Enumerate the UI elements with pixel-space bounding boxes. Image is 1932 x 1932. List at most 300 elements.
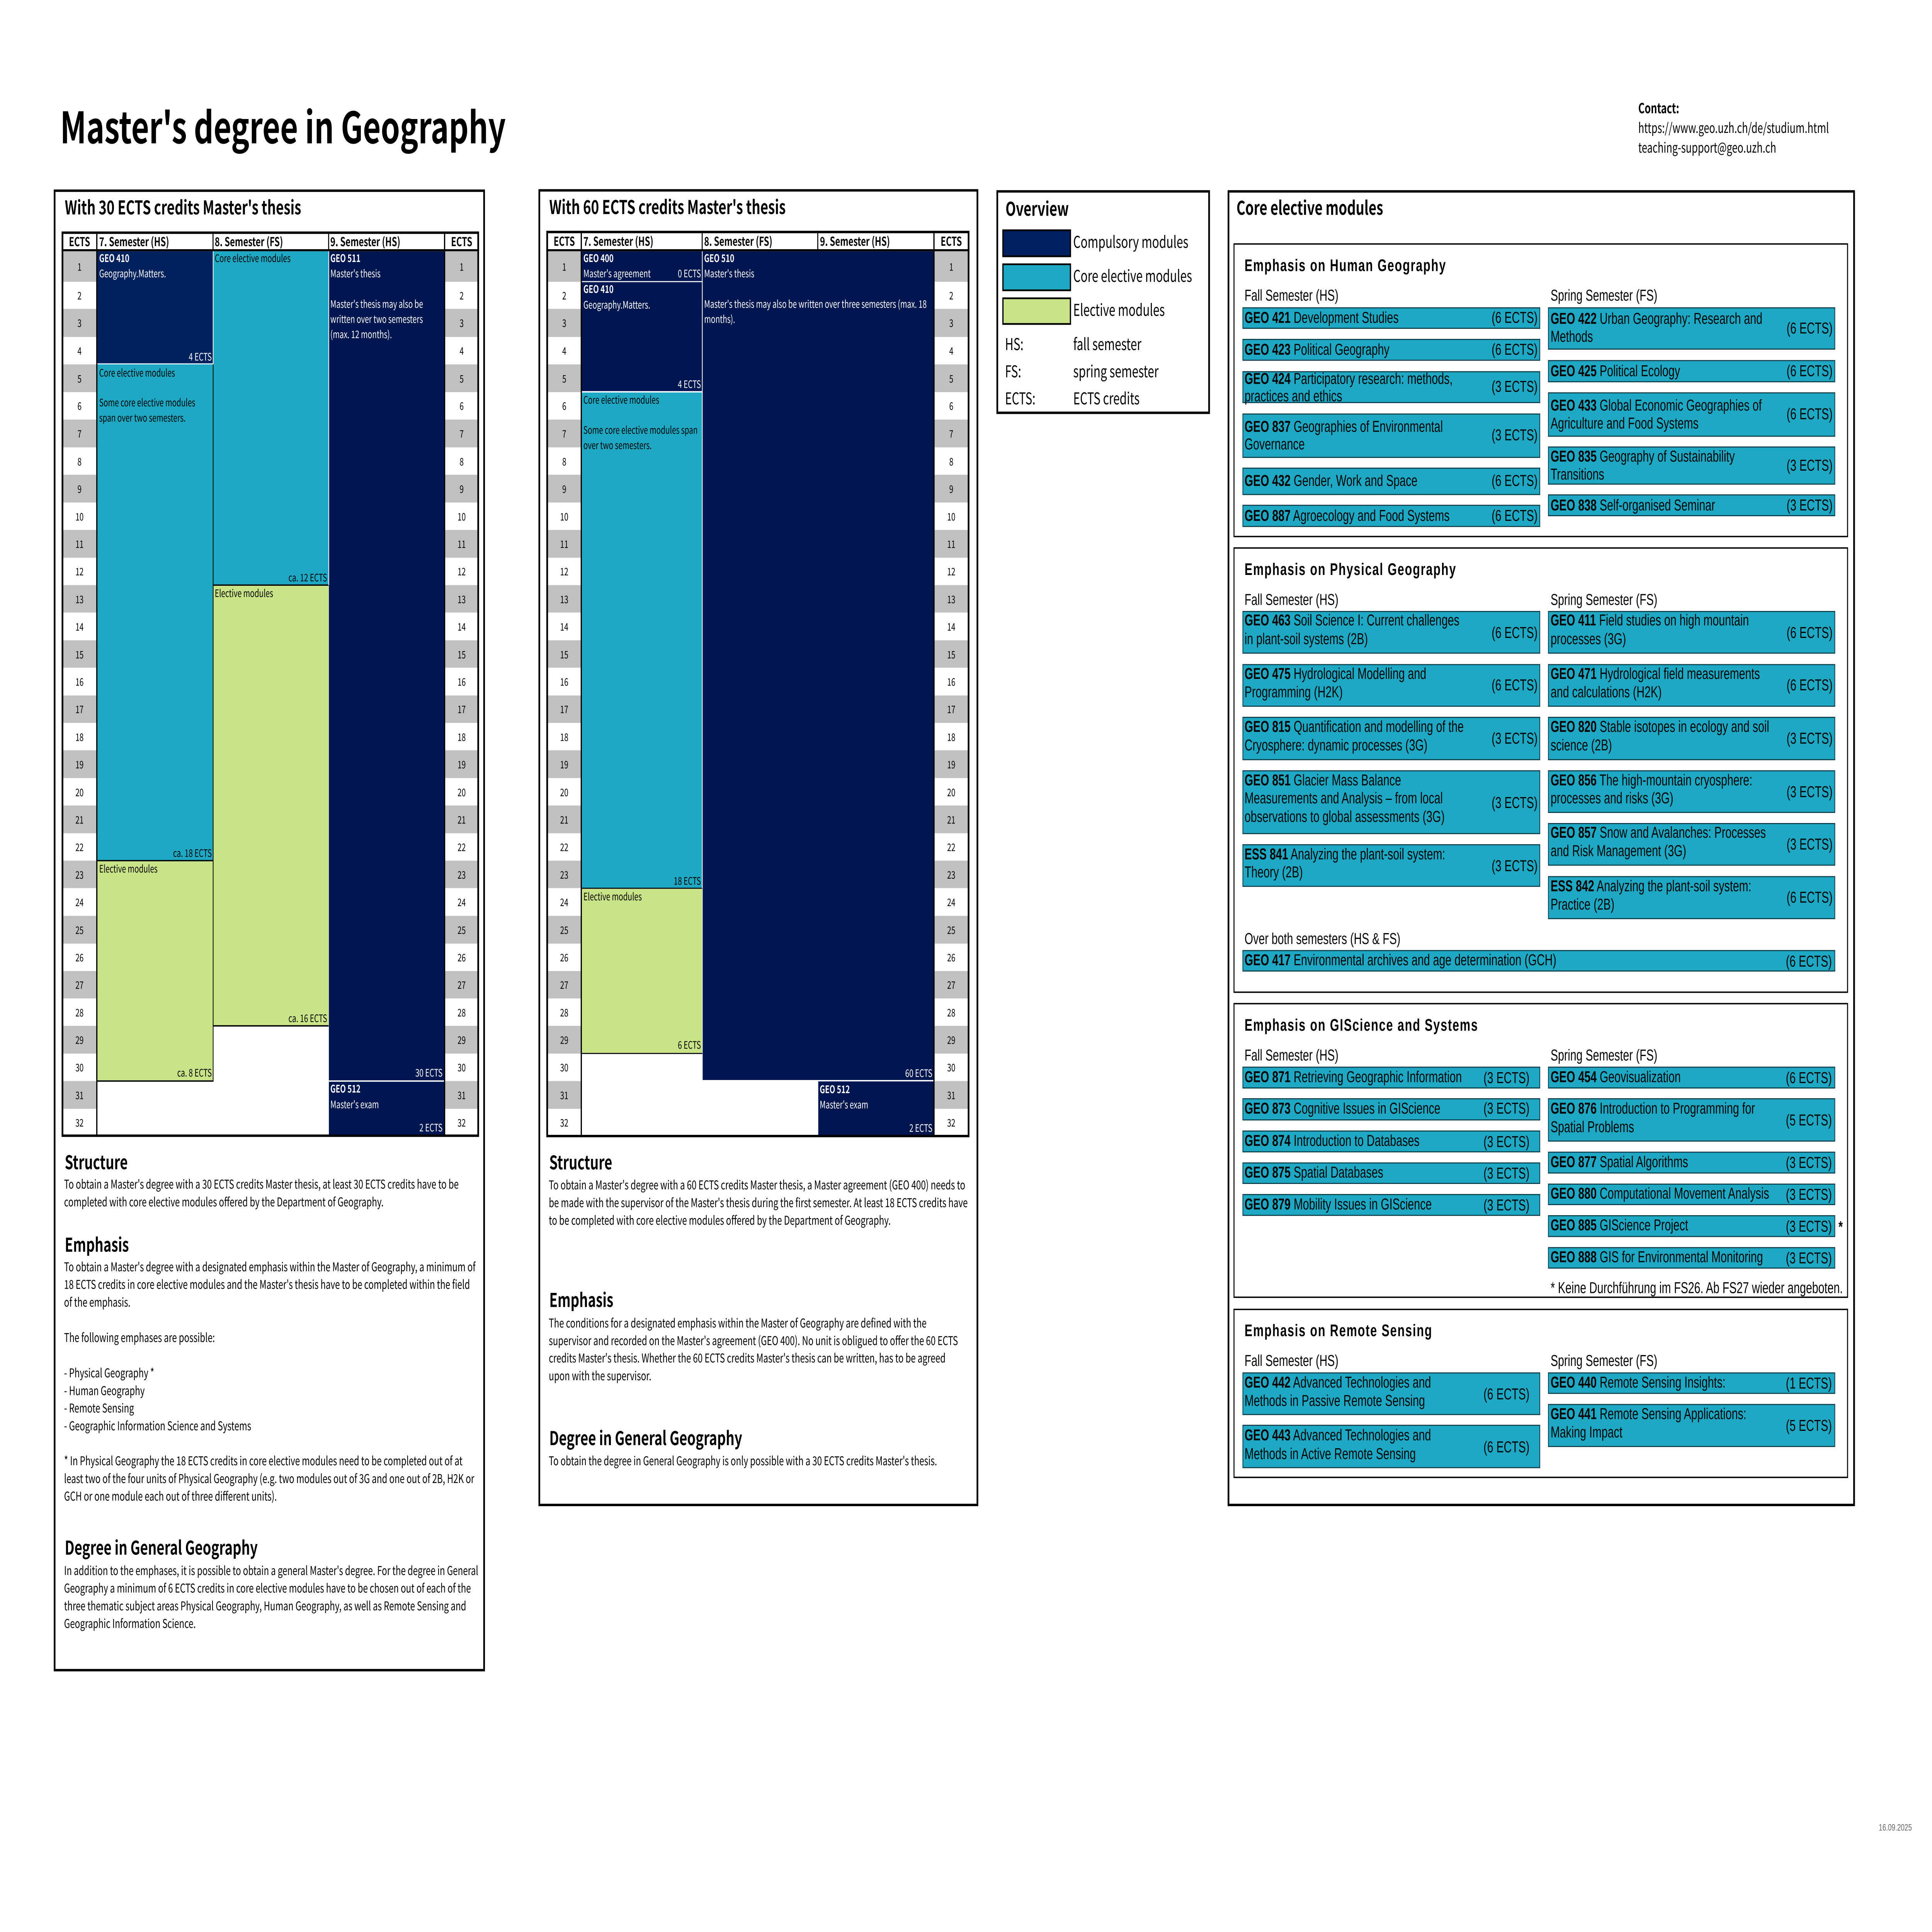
module: GEO 410 — [582, 281, 702, 393]
module: GEO 410: 4 ECTS — [189, 349, 212, 364]
legend: core elective modules — [1003, 263, 1192, 290]
table header row: 7. Semester (HS) — [583, 231, 653, 249]
module: GEO 835: (3 ECTS) — [1787, 457, 1833, 474]
contact block — [1638, 97, 1829, 157]
module: GEO 442: GEO 442 Advanced Technologies and — [1245, 1374, 1431, 1391]
module: GEO 885 — [1548, 1216, 1835, 1236]
module: GEO 510 Master's thesis: GEO 510 — [704, 250, 734, 265]
right ECTS column: 19 — [947, 756, 955, 772]
left ECTS column: 23 — [75, 867, 83, 882]
module: GEO 421 — [1243, 308, 1540, 328]
left ECTS column: 24 — [560, 894, 568, 909]
date stamp: 16.09.2025 — [1879, 1823, 1912, 1833]
footnote: * Keine Durchführung im FS26. Ab FS27 wieder angeboten. — [1551, 1279, 1843, 1297]
module: GEO 875: (3 ECTS) — [1483, 1165, 1529, 1182]
left ECTS column: 15 — [75, 646, 83, 662]
text: structure: completed with core elective modules offered by the Department of Geography. — [64, 1192, 384, 1210]
text: emphasis: least two of the four units of Physical Geography (e.g. two modules out of 3G and one out of 2B, H2K or — [64, 1469, 474, 1486]
text: emphasis: GCH or one module each out of three different units). — [64, 1486, 277, 1504]
module: GEO 851: GEO 851 Glacier Mass Balance — [1245, 772, 1401, 789]
module: GEO 851: (3 ECTS) — [1492, 794, 1537, 811]
left ECTS column: 12 — [560, 563, 568, 578]
module: GEO 423: (6 ECTS) — [1492, 341, 1537, 358]
abbreviations: spring semester — [1073, 359, 1159, 382]
module: GEO 511 Master's thesis: written over two semesters — [330, 311, 423, 326]
text: degree in general geography — [64, 1533, 478, 1631]
semester labels: Fall Semester (HS) — [1245, 1352, 1338, 1369]
module: GEO 475: Programming (H2K) — [1245, 684, 1343, 701]
module: ESS 841: ESS 841 Analyzing the plant-soil system: — [1245, 845, 1445, 863]
right ECTS column: 24 — [457, 894, 466, 909]
module: GEO 876: Spatial Problems — [1551, 1118, 1634, 1136]
module: GEO 835: GEO 835 Geography of Sustainability — [1551, 448, 1735, 465]
right ECTS column: 7 — [949, 425, 953, 441]
right ECTS column: 15 — [457, 646, 466, 662]
right ECTS column: 18 — [457, 729, 466, 744]
module: GEO 443: (6 ECTS) — [1483, 1439, 1529, 1456]
module: GEO 511 Master's thesis: Master's thesis may also be — [330, 296, 423, 311]
module: GEO 837: GEO 837 Geographies of Environmental — [1245, 418, 1443, 435]
block: elective modules: Elective modules — [583, 888, 642, 903]
module: GEO 512 Master's exam: Master's exam — [330, 1096, 379, 1111]
right ECTS column: 26 — [457, 949, 466, 964]
left ECTS column: 24 — [75, 894, 83, 909]
block: elective modules, semester 8 — [213, 585, 328, 1027]
left ECTS column: 25 — [560, 922, 568, 937]
module: GEO 815: (3 ECTS) — [1492, 730, 1537, 747]
block: elective modules, semester 7: Elective modules — [99, 861, 158, 876]
semester labels — [1245, 1047, 1657, 1064]
module: GEO 423: GEO 423 Political Geography — [1245, 341, 1389, 358]
block: elective modules — [582, 888, 702, 1054]
abbreviations: FS: — [1005, 359, 1021, 382]
left ECTS column: 31 — [560, 1087, 568, 1102]
text: structure: Structure — [65, 1147, 128, 1175]
block: core elective modules, semester 7: ca. 18 ECTS — [173, 845, 212, 860]
heading: core elective modules: Core elective modules — [1236, 193, 1383, 221]
left ECTS column: 18 — [560, 729, 568, 744]
module: GEO 837 — [1243, 414, 1540, 457]
right ECTS column: 22 — [457, 839, 466, 854]
heading: physical geography: Emphasis on Physical Geography — [1245, 560, 1456, 578]
text: degree in general geography: In addition to the emphases, it is possible to obtain a general Master's degree. For the degree in General — [64, 1561, 478, 1578]
module: GEO 880 — [1548, 1184, 1835, 1204]
right ECTS column — [935, 251, 968, 1129]
text: structure: to be completed with core elective modules offered by the Department of Geography. — [549, 1211, 891, 1228]
module: GEO 510 Master's thesis: Master's thesis — [704, 265, 754, 281]
module: GEO 879: GEO 879 Mobility Issues in GIScience — [1245, 1196, 1432, 1213]
module: GEO 510 Master's thesis: months). — [704, 311, 735, 326]
right ECTS column: 15 — [947, 646, 955, 662]
left ECTS column: 25 — [75, 922, 83, 937]
module: GEO 815: GEO 815 Quantification and modelling of the — [1245, 718, 1464, 735]
module: GEO 425 — [1548, 361, 1835, 382]
module: GEO 511 Master's thesis — [329, 250, 444, 1081]
module: GEO 887 — [1243, 505, 1540, 526]
module: GEO 887: (6 ECTS) — [1492, 507, 1537, 524]
module: GEO 820: GEO 820 Stable isotopes in ecology and soil — [1551, 718, 1769, 735]
right ECTS column: 31 — [457, 1087, 466, 1102]
right ECTS column: 23 — [457, 867, 466, 882]
module: GEO 820 — [1548, 717, 1835, 760]
block: elective modules, semester 7: ca. 8 ECTS — [177, 1065, 212, 1080]
module: ESS 842: (6 ECTS) — [1787, 889, 1833, 906]
left ECTS column: 20 — [75, 784, 83, 799]
left ECTS column: 4 — [562, 343, 566, 358]
module: GEO 463: (6 ECTS) — [1492, 624, 1537, 641]
left ECTS column: 30 — [560, 1059, 568, 1075]
module: GEO 838: (3 ECTS) — [1787, 497, 1833, 514]
module: GEO 463: in plant-soil systems (2B) — [1245, 630, 1368, 648]
module: GEO 885: (3 ECTS) — [1786, 1218, 1832, 1235]
module: GEO 471: and calculations (H2K) — [1551, 684, 1662, 701]
text: emphasis: * In Physical Geography the 18 ECTS credits in core elective modules need to be completed out of at — [64, 1451, 463, 1469]
module: GEO 874 — [1243, 1131, 1540, 1152]
module: GEO 433: (6 ECTS) — [1787, 405, 1833, 423]
module: GEO 440: GEO 440 Remote Sensing Insights: — [1551, 1374, 1726, 1391]
semester labels: Spring Semester (FS) — [1551, 591, 1657, 609]
semester labels: Fall Semester (HS) — [1245, 591, 1338, 609]
right ECTS column: 12 — [947, 563, 955, 578]
left ECTS column: 26 — [75, 949, 83, 964]
left ECTS column: 14 — [560, 619, 568, 634]
module: GEO 857: GEO 857 Snow and Avalanches: Processes — [1551, 824, 1766, 841]
text: degree in general geography: Degree in General Geography — [549, 1423, 742, 1451]
text: emphasis — [549, 1285, 958, 1384]
module: ESS 841: (3 ECTS) — [1492, 857, 1537, 875]
right ECTS column: 2 — [949, 287, 953, 303]
left ECTS column: 1 — [562, 259, 566, 274]
block: elective modules: 6 ECTS — [678, 1037, 701, 1052]
sub-panel: emphasis on GIScience and systems — [1234, 1003, 1848, 1297]
heading: GIScience: Emphasis on GIScience and Systems — [1245, 1015, 1478, 1034]
module: GEO 424 — [1243, 370, 1540, 405]
right ECTS column — [445, 251, 478, 1129]
right ECTS column: 18 — [947, 729, 955, 744]
module: GEO 475: (6 ECTS) — [1492, 677, 1537, 694]
text: structure: To obtain a Master's degree with a 60 ECTS credits Master thesis, a Master agreement (GEO 400) needs to — [549, 1175, 965, 1193]
semester labels: Fall Semester (HS) — [1245, 1047, 1338, 1064]
left ECTS column: 23 — [560, 867, 568, 882]
right ECTS column: 6 — [949, 398, 953, 413]
right ECTS column: 25 — [947, 922, 955, 937]
left ECTS column: 9 — [562, 481, 566, 496]
right ECTS column: 32 — [947, 1114, 955, 1129]
module: GEO 440: (1 ECTS) — [1786, 1375, 1832, 1392]
right ECTS column: 5 — [949, 371, 953, 386]
text: emphasis: 18 ECTS credits in core elective modules and the Master's thesis have to be completed within the field — [64, 1275, 470, 1293]
table header row — [554, 231, 962, 249]
module: GEO 410: GEO 410 — [583, 281, 614, 296]
module: GEO 425: (6 ECTS) — [1787, 362, 1833, 380]
left ECTS column: 13 — [560, 591, 568, 606]
text: emphasis: Emphasis — [549, 1285, 613, 1313]
module: GEO 873: (3 ECTS) — [1483, 1100, 1529, 1117]
text: emphasis: of the emphasis. — [64, 1293, 131, 1310]
module: GEO 432: GEO 432 Gender, Work and Space — [1245, 472, 1417, 490]
legend: compulsory modules: Compulsory modules — [1073, 229, 1188, 253]
module: GEO 511 Master's thesis: GEO 511 — [330, 250, 361, 265]
left ECTS column: 13 — [75, 591, 83, 606]
module: GEO 454 — [1548, 1067, 1835, 1088]
block: core elective modules: Core elective modules — [583, 391, 659, 407]
footnote marker: * — [1838, 1218, 1843, 1236]
right ECTS column: 21 — [457, 811, 466, 827]
module: GEO 510 Master's thesis — [702, 250, 934, 1081]
table header row: ECTS — [554, 231, 575, 249]
left ECTS column: 29 — [75, 1032, 83, 1047]
module: GEO 835 — [1548, 447, 1835, 484]
left ECTS column: 19 — [75, 756, 83, 772]
right ECTS column: 13 — [947, 591, 955, 606]
left ECTS column: 21 — [560, 811, 568, 827]
module: GEO 443 — [1243, 1425, 1540, 1468]
module: ESS 842: ESS 842 Analyzing the plant-soil system: — [1551, 878, 1751, 895]
module: GEO 838 — [1548, 495, 1835, 516]
left ECTS column: 10 — [560, 509, 568, 524]
module: GEO 471: (6 ECTS) — [1787, 677, 1833, 694]
left ECTS column: 27 — [75, 977, 83, 992]
table header row: 8. Semester (FS) — [215, 232, 283, 250]
semester labels — [1245, 287, 1657, 304]
module: GEO 820: science (2B) — [1551, 736, 1612, 754]
left ECTS column: 28 — [75, 1005, 83, 1020]
left ECTS column: 26 — [560, 949, 568, 964]
left ECTS column: 12 — [75, 563, 83, 578]
module: GEO 887: GEO 887 Agroecology and Food Systems — [1245, 507, 1450, 524]
left ECTS column: 22 — [560, 839, 568, 854]
legend: compulsory modules — [1003, 229, 1188, 256]
module: GEO 879: (3 ECTS) — [1483, 1197, 1529, 1214]
module: GEO 424: GEO 424 Participatory research: methods, — [1245, 370, 1452, 388]
right ECTS column: 20 — [457, 784, 466, 799]
module: GEO 422: GEO 422 Urban Geography: Research and — [1551, 310, 1762, 327]
right ECTS column: 16 — [947, 674, 955, 689]
semester labels: Spring Semester (FS) — [1551, 1047, 1657, 1064]
left ECTS column: 15 — [560, 646, 568, 662]
module: GEO 512 Master's exam: GEO 512 — [330, 1080, 361, 1095]
right ECTS column: 29 — [457, 1032, 466, 1047]
block: core elective modules, semester 7 — [97, 364, 213, 861]
module: GEO 873 — [1243, 1099, 1540, 1120]
right ECTS column: 27 — [947, 977, 955, 992]
text: structure — [549, 1148, 968, 1228]
legend: elective modules: Elective modules — [1073, 297, 1165, 321]
left ECTS column: 14 — [75, 619, 83, 634]
left ECTS column: 30 — [75, 1059, 83, 1075]
right ECTS column: 14 — [457, 619, 466, 634]
module: GEO 471 — [1548, 665, 1835, 706]
module: GEO 851: observations to global assessments (3G) — [1245, 808, 1445, 825]
right ECTS column: 3 — [949, 315, 953, 330]
block: elective modules, semester 8: ca. 16 ECTS — [289, 1010, 327, 1025]
text: emphasis: The conditions for a designated emphasis within the Master of Geography are defined with the — [549, 1313, 927, 1331]
module: GEO 442 — [1243, 1373, 1540, 1415]
right ECTS column: 10 — [947, 509, 955, 524]
module: GEO 874: (3 ECTS) — [1483, 1133, 1529, 1151]
table header row: ECTS — [940, 231, 962, 249]
left ECTS column: 29 — [560, 1032, 568, 1047]
module: GEO 815: Cryosphere: dynamic processes (3G) — [1245, 736, 1427, 754]
abbreviations: fall semester — [1073, 332, 1142, 355]
text: emphasis — [64, 1230, 476, 1504]
right ECTS column: 32 — [457, 1114, 466, 1129]
right ECTS column: 2 — [459, 287, 464, 303]
module: GEO 400 Master's agreement — [582, 250, 702, 282]
legend: core elective modules: Core elective modules — [1073, 263, 1192, 287]
text: emphasis: credits Master's thesis. Whether the 60 ECTS credits Master's thesis can be written, has to be agreed — [549, 1348, 946, 1366]
module: ESS 842 — [1548, 877, 1835, 918]
right ECTS column: 29 — [947, 1032, 955, 1047]
module: GEO 424: practices and ethics — [1245, 387, 1342, 405]
right ECTS column: 31 — [947, 1087, 955, 1102]
module: GEO 421: GEO 421 Development Studies — [1245, 309, 1399, 327]
text: emphasis: - Human Geography — [64, 1381, 145, 1399]
right ECTS column: 7 — [459, 425, 464, 441]
text: structure — [64, 1147, 459, 1210]
module: GEO 879 — [1243, 1194, 1540, 1215]
module: GEO 422: (6 ECTS) — [1787, 320, 1833, 337]
module: GEO 876 — [1548, 1099, 1835, 1141]
module: GEO 442: Methods in Passive Remote Sensing — [1245, 1392, 1425, 1410]
abbreviations: ECTS credits — [1073, 386, 1139, 409]
left ECTS column: 17 — [75, 701, 83, 716]
module: GEO 433: Agriculture and Food Systems — [1551, 415, 1699, 432]
block: elective modules, semester 7 — [97, 861, 213, 1082]
module: GEO 512 Master's exam: Master's exam — [820, 1097, 868, 1112]
abbreviations: ECTS: — [1005, 386, 1036, 409]
module: GEO 441 — [1548, 1405, 1835, 1446]
left ECTS column: 32 — [75, 1114, 83, 1129]
contact block: teaching-support@geo.uzh.ch — [1638, 137, 1776, 157]
module: GEO 425: GEO 425 Political Ecology — [1551, 362, 1680, 380]
module: GEO 511 Master's thesis: 30 ECTS — [415, 1065, 442, 1080]
sub-panel: emphasis on human geography — [1234, 244, 1848, 537]
heading: overview: Overview — [1005, 194, 1069, 222]
table header row: 7. Semester (HS) — [99, 232, 169, 250]
module: GEO 417: GEO 417 Environmental archives and age determination (GCH) — [1245, 951, 1556, 969]
right ECTS column: 9 — [949, 481, 953, 496]
text: emphasis: Emphasis — [65, 1230, 129, 1258]
right ECTS column: 30 — [947, 1059, 955, 1075]
module: GEO 471: GEO 471 Hydrological field measurements — [1551, 665, 1760, 682]
module: GEO 877: (3 ECTS) — [1786, 1154, 1832, 1172]
module: GEO 512 Master's exam — [329, 1080, 444, 1136]
module: GEO 417 — [1243, 951, 1835, 971]
block: core elective modules, semester 7: span over two semesters. — [99, 410, 185, 425]
text: structure: Structure — [549, 1148, 612, 1175]
module: GEO 512 Master's exam: 2 ECTS — [909, 1120, 932, 1135]
abbreviations: HS: — [1005, 332, 1024, 355]
text: degree in general geography: Geographic Information Science. — [64, 1614, 196, 1631]
module: GEO 837: (3 ECTS) — [1492, 427, 1537, 444]
text: degree in general geography: Degree in General Geography — [65, 1533, 258, 1561]
block: core elective modules: Some core elective modules span — [583, 422, 698, 437]
text: emphasis: - Geographic Information Science and Systems — [64, 1416, 251, 1434]
table header row: 8. Semester (FS) — [704, 231, 772, 249]
right ECTS column: 11 — [457, 536, 466, 551]
module: GEO 871: GEO 871 Retrieving Geographic Information — [1245, 1068, 1462, 1086]
module: GEO 856 — [1548, 771, 1835, 813]
module: GEO 511 Master's thesis: Master's thesis — [330, 265, 381, 281]
module: GEO 511 Master's thesis: (max. 12 months). — [330, 326, 392, 341]
module: GEO 442: (6 ECTS) — [1483, 1386, 1529, 1403]
right ECTS column: 14 — [947, 619, 956, 634]
module: GEO 463: GEO 463 Soil Science I: Current challenges — [1245, 612, 1459, 629]
right ECTS column: 9 — [459, 481, 464, 496]
left ECTS column: 6 — [78, 398, 82, 413]
module: GEO 837: Governance — [1245, 435, 1305, 453]
right ECTS column: 16 — [457, 674, 466, 689]
module: GEO 441: (5 ECTS) — [1786, 1417, 1832, 1434]
module: GEO 410: GEO 410 — [99, 250, 129, 265]
module: GEO 880: GEO 880 Computational Movement Analysis — [1551, 1185, 1769, 1202]
left ECTS column: 18 — [75, 729, 83, 744]
module: GEO 475: GEO 475 Hydrological Modelling and — [1245, 665, 1426, 682]
module: GEO 440 — [1548, 1373, 1835, 1393]
heading: remote sensing: Emphasis on Remote Sensing — [1245, 1321, 1432, 1340]
right ECTS column: 5 — [459, 371, 464, 386]
text: structure: be made with the supervisor of the Master's thesis during the first semester. At least 18 ECTS credits have — [549, 1193, 968, 1211]
block: core elective modules, semester 7: Some core elective modules — [99, 395, 195, 410]
text: emphasis: upon with the supervisor. — [549, 1366, 651, 1384]
module: GEO 857: (3 ECTS) — [1787, 836, 1833, 853]
module: GEO 417: (6 ECTS) — [1786, 953, 1832, 970]
right ECTS column: 12 — [457, 563, 466, 578]
text: emphasis: To obtain a Master's degree with a designated emphasis within the Master of Geography, a minimum of — [64, 1257, 476, 1275]
left ECTS column — [547, 251, 581, 1129]
module: GEO 838: GEO 838 Self-organised Seminar — [1551, 497, 1715, 514]
left ECTS column: 11 — [75, 536, 83, 551]
left ECTS column: 5 — [562, 371, 566, 386]
panel: with 60 ECTS credits Master's thesis — [539, 190, 978, 1505]
left ECTS column: 31 — [75, 1087, 83, 1102]
module: GEO 433 — [1548, 393, 1835, 436]
block: core elective modules, semester 8: Core elective modules — [215, 250, 291, 265]
right ECTS column: 8 — [459, 453, 464, 469]
module: GEO 441: Making Impact — [1551, 1423, 1622, 1441]
module: GEO 421: (6 ECTS) — [1492, 309, 1537, 327]
left ECTS column: 8 — [78, 453, 82, 469]
right ECTS column: 27 — [457, 977, 466, 992]
left ECTS column: 21 — [75, 811, 83, 827]
block: core elective modules: 18 ECTS — [674, 872, 701, 888]
module: ESS 841: Theory (2B) — [1245, 864, 1303, 881]
label: over both semesters: Over both semesters (HS & FS) — [1245, 930, 1400, 947]
module: GEO 512 Master's exam: GEO 512 — [820, 1081, 850, 1096]
left ECTS column: 20 — [560, 784, 568, 799]
left ECTS column: 10 — [75, 509, 83, 524]
text: emphasis: supervisor and recorded on the Master's agreement (GEO 400). No unit is obligued to offer the 60 ECTS — [549, 1331, 958, 1349]
study plan table: 60 ECTS — [546, 231, 969, 1137]
module: GEO 871 — [1243, 1067, 1540, 1088]
right ECTS column: 22 — [947, 839, 955, 854]
table header row: ECTS — [69, 232, 90, 250]
left ECTS column: 2 — [78, 287, 82, 303]
module: GEO 885: GEO 885 GIScience Project — [1551, 1216, 1688, 1234]
right ECTS column: 19 — [457, 756, 466, 772]
semester labels — [1245, 1352, 1657, 1369]
left ECTS column: 28 — [560, 1005, 568, 1020]
block: core elective modules, semester 8 — [213, 250, 328, 586]
module: GEO 475 — [1243, 665, 1540, 706]
module: GEO 400 Master's agreement: Master's agreement — [583, 265, 651, 281]
module: GEO 876: (5 ECTS) — [1786, 1112, 1832, 1129]
module: GEO 510 Master's thesis: 60 ECTS — [905, 1065, 932, 1080]
module: GEO 876: GEO 876 Introduction to Programming for — [1551, 1100, 1755, 1117]
module: GEO 835: Transitions — [1551, 466, 1604, 483]
module: GEO 856: (3 ECTS) — [1787, 783, 1833, 801]
